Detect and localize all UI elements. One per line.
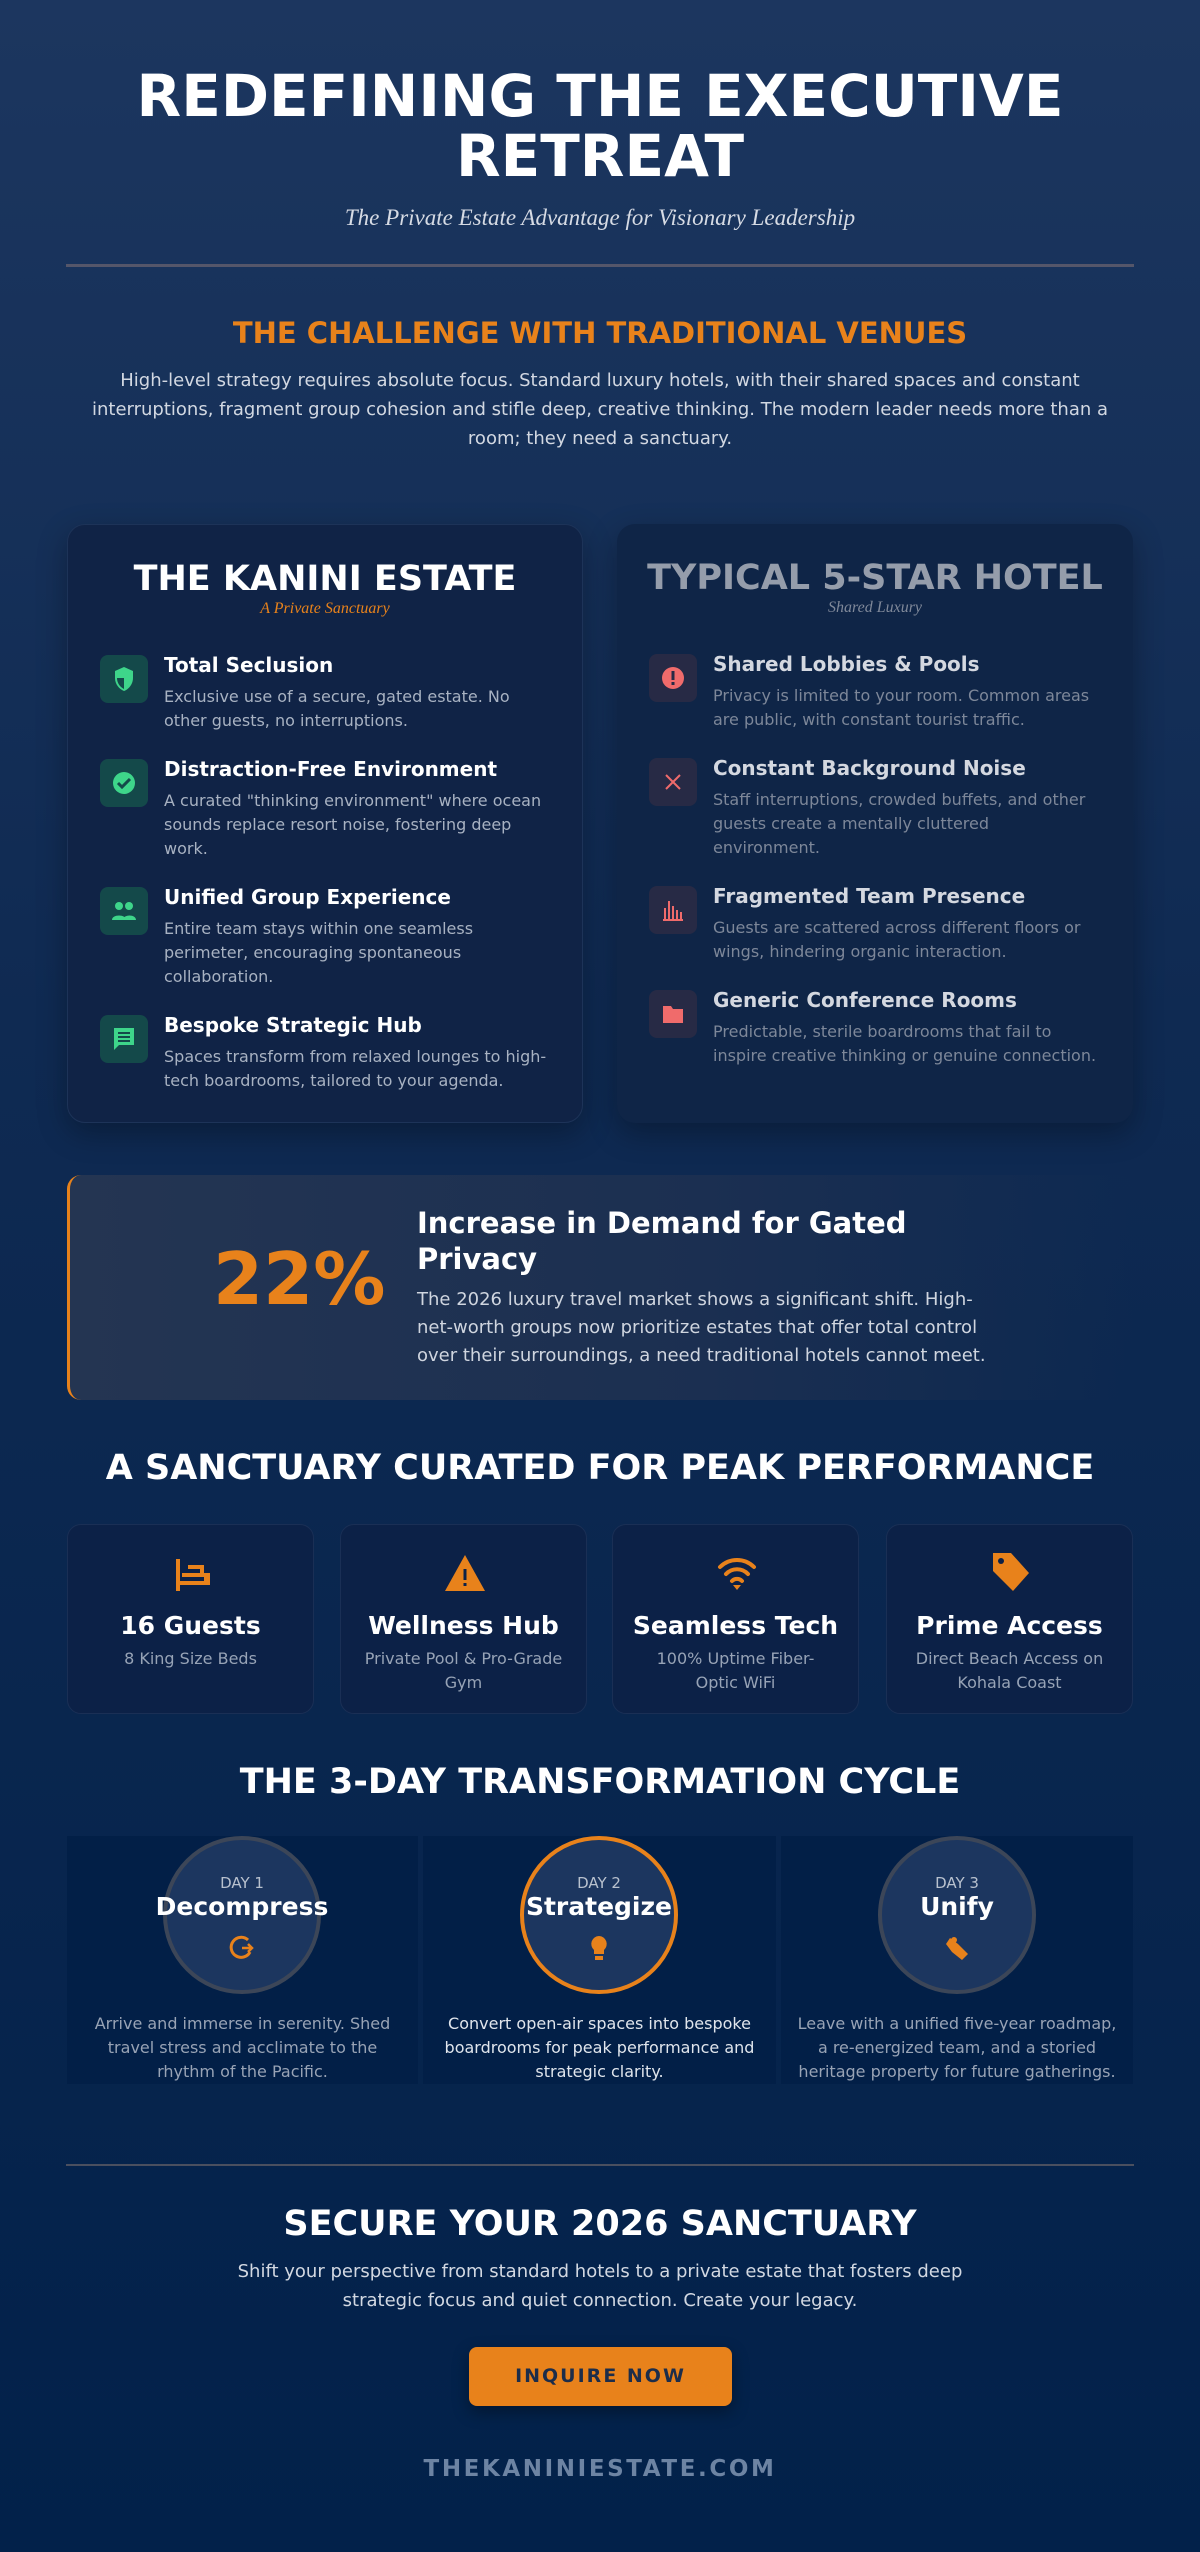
step: day 3: a re-energized team, and a storied [818,2038,1096,2057]
item: noise: Staff interruptions, crowded buffets, and other [713,790,1085,809]
step: day 1: Arrive and immerse in serenity. Shed [95,2014,390,2033]
item: strategic hub [100,1013,546,1090]
feature: guests: 16 Guests [120,1611,261,1640]
item: conference rooms: Predictable, sterile boardrooms that fail to [713,1022,1051,1041]
cta text: Shift your perspective from standard hotels to a private estate that fosters deep strategic focus and quiet connection. Create your legacy. [238,2261,962,2311]
icon: warning [445,1555,485,1591]
icon: tag [993,1553,1029,1591]
item: seclusion: Total Seclusion [164,653,333,677]
step: day 1: rhythm of the Pacific. [157,2062,328,2081]
feature: guests [67,1524,314,1714]
stat text: The 2026 luxury travel market shows a significant shift. High- [417,1289,973,1310]
item: fragmented [649,884,1080,961]
item: fragmented: Fragmented Team Presence [713,884,1025,908]
footer url: THEKANINIESTATE.COM [424,2456,776,2482]
feature: tech: Seamless Tech [633,1611,838,1640]
item: distraction-free: sounds replace resort noise, fostering deep [164,815,511,834]
title: RETREAT [456,122,744,190]
item: conference rooms [649,988,1096,1065]
item: noise [649,756,1086,857]
step: day 1 [67,1836,418,2084]
item: seclusion: Exclusive use of a secure, gated estate. No [164,687,510,706]
step: day 2: boardrooms for peak performance and [445,2038,754,2057]
item: unified group: perimeter, encouraging spontaneous [164,943,461,962]
card title: THE KANINI ESTATE [134,559,516,599]
button: inquire now: INQUIRE NOW [515,2365,686,2387]
title: REDEFINING THE EXECUTIVE [137,62,1063,130]
item: strategic hub: Spaces transform from relaxed lounges to high- [164,1047,546,1066]
item: shared lobbies: Shared Lobbies & Pools [713,652,980,676]
card subtitle: Shared Luxury [828,599,922,616]
challenge paragraph: High-level strategy requires absolute focus. Standard luxury hotels, with their shared spaces and constant interruptions, fragment group cohesion and stifle deep, creative thinking. The modern leader needs more than a room; they need a sanctuary. [92,370,1108,449]
stat number: 22% [213,1237,385,1321]
item: shared lobbies: are public, with constant tourist traffic. [713,710,1025,729]
feature: tech: Optic WiFi [696,1673,775,1692]
item: seclusion [100,653,510,730]
item: strategic hub: Bespoke Strategic Hub [164,1013,422,1037]
item: conference rooms: Generic Conference Rooms [713,988,1017,1012]
title [137,62,1063,190]
feature: wellness: Wellness Hub [368,1611,559,1640]
feature: tech [612,1524,859,1714]
feature: tech: 100% Uptime Fiber- [657,1649,814,1668]
feature: wellness [340,1524,587,1714]
step: day 2: strategic clarity. [535,2062,664,2081]
icon: wifi [718,1558,756,1590]
circle day 3 [878,1836,1036,1994]
item: distraction-free: A curated "thinking environment" where ocean [164,791,541,810]
feature: wellness: Gym [445,1673,482,1692]
item: unified group: collaboration. [164,967,273,986]
icon: bed [176,1559,210,1591]
item: noise: guests create a mentally cluttered [713,814,989,833]
panel: typical hotel [617,524,1133,1123]
heading: 3-day cycle: THE 3-DAY TRANSFORMATION CYCLE [240,1762,960,1802]
circle day 1 [163,1836,321,1994]
heading: cta: SECURE YOUR 2026 SANCTUARY [283,2204,917,2244]
circle day 2: DAY 2 [577,1874,621,1892]
item: seclusion: other guests, no interruptions. [164,711,408,730]
feature: guests: 8 King Size Beds [124,1649,257,1668]
feature: access: Kohala Coast [957,1673,1062,1692]
item: unified group: Unified Group Experience [164,885,451,909]
step: day 3 [781,1836,1133,2084]
step: day 2: Convert open-air spaces into bespoke [448,2014,751,2033]
item: unified group: Entire team stays within one seamless [164,919,473,938]
item: fragmented: Guests are scattered across different floors or [713,918,1080,937]
subtitle: The Private Estate Advantage for Visionary Leadership [345,205,855,230]
heading: challenge: THE CHALLENGE WITH TRADITIONAL VENUES [233,316,967,350]
item: distraction-free: work. [164,839,208,858]
feature: wellness: Private Pool & Pro-Grade [365,1649,562,1668]
item: fragmented: wings, hindering organic interaction. [713,942,1007,961]
item: shared lobbies: Privacy is limited to your room. Common areas [713,686,1089,705]
step: day 2 [423,1836,776,2084]
step: day 3: Leave with a unified five-year roadmap, [798,2014,1116,2033]
circle day 2: Strategize [526,1892,672,1921]
stat text [416,1289,986,1366]
circle day 3: DAY 3 [935,1874,979,1892]
stat heading: Increase in Demand for Gated Privacy [417,1206,907,1276]
circle day 3: Unify [920,1892,994,1921]
item: conference rooms: inspire creative thinking or genuine connection. [713,1046,1096,1065]
item: distraction-free: Distraction-Free Environment [164,757,497,781]
stat text: net-worth groups now prioritize estates that offer total control [417,1317,977,1338]
callout: 22% stat [67,1175,1133,1400]
item: strategic hub: tech boardrooms, tailored to your agenda. [164,1071,504,1090]
item: shared lobbies [649,652,1089,729]
circle day 2 [520,1836,678,1994]
circle day 1: Decompress [156,1892,328,1921]
item: unified group [100,885,473,986]
stat text: over their surroundings, a need traditional hotels cannot meet. [417,1345,986,1366]
step: day 1: travel stress and acclimate to the [108,2038,377,2057]
heading: sanctuary: A SANCTUARY CURATED FOR PEAK PERFORMANCE [106,1448,1094,1488]
item: noise: Constant Background Noise [713,756,1026,780]
button: inquire now [469,2347,732,2406]
circle day 1: DAY 1 [220,1874,264,1892]
feature: access [886,1524,1133,1714]
feature: access: Prime Access [916,1611,1103,1640]
item: noise: environment. [713,838,820,857]
step: day 3: heritage property for future gatherings. [798,2062,1116,2081]
feature: access: Direct Beach Access on [916,1649,1103,1668]
card title: TYPICAL 5-STAR HOTEL [647,558,1103,598]
item: distraction-free [100,757,541,858]
card subtitle: A Private Sanctuary [260,600,390,617]
panel: kanini estate [67,524,583,1123]
